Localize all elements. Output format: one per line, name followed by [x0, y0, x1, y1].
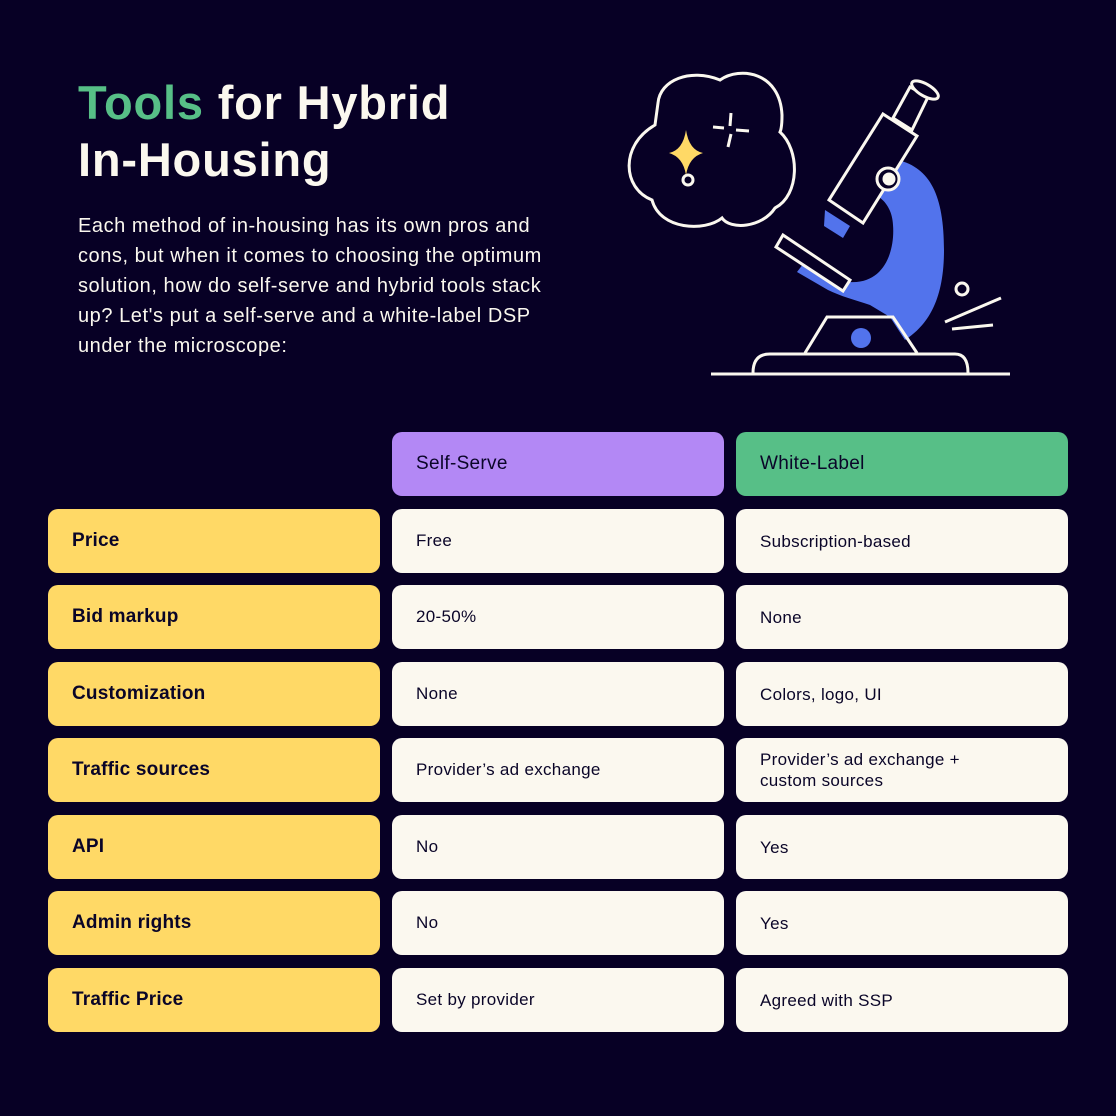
intro paragraph: up? Let's put a self-serve and a white-label DSP — [78, 305, 531, 327]
row: Admin rights: Admin rights — [72, 912, 192, 933]
title: In-Housing — [78, 133, 331, 186]
row: Traffic sources: Provider’s ad exchange + — [760, 750, 960, 769]
row: Admin rights: Yes — [760, 914, 789, 932]
row: Traffic Price: Set by provider — [416, 990, 535, 1009]
row: Price: Price — [72, 530, 119, 551]
row: Customization: None — [416, 684, 458, 703]
row: Price: Free — [416, 531, 452, 550]
row: Bid markup: 20-50% — [416, 607, 476, 626]
row: Traffic sources: Provider’s ad exchange — [416, 760, 601, 779]
row: API — [48, 815, 1068, 879]
row: Price: Subscription-based — [760, 532, 911, 550]
row: API: Yes — [760, 838, 789, 856]
row: Bid markup — [48, 585, 1068, 649]
table header: White-Label: White-Label — [760, 453, 865, 474]
row: API: API — [72, 836, 104, 857]
intro paragraph: under the microscope: — [78, 335, 287, 357]
row: Traffic Price — [48, 968, 1068, 1032]
row: Customization: Customization — [72, 683, 206, 704]
icon: thought cloud — [629, 73, 794, 226]
row: Traffic sources — [48, 738, 1068, 802]
row: Traffic Price: Agreed with SSP — [760, 990, 893, 1010]
icon: microscope — [711, 77, 1010, 374]
row: Bid markup: None — [760, 608, 802, 626]
row: Price — [48, 509, 1068, 573]
title — [78, 76, 450, 186]
table header: White-Label — [736, 432, 1068, 496]
title: Tools for Hybrid — [78, 76, 450, 129]
intro paragraph: cons, but when it comes to choosing the optimum — [78, 245, 542, 267]
intro paragraph: solution, how do self-serve and hybrid tools stack — [78, 275, 541, 297]
intro paragraph — [78, 215, 542, 357]
intro paragraph: Each method of in-housing has its own pros and — [78, 215, 530, 237]
row: Traffic sources: Traffic sources — [72, 759, 210, 780]
row: Traffic Price: Traffic Price — [72, 989, 183, 1010]
table header: Self-Serve — [392, 432, 724, 496]
row: API: No — [416, 837, 438, 856]
row: Customization: Colors, logo, UI — [760, 684, 882, 704]
row: Admin rights — [48, 891, 1068, 955]
row: Customization — [48, 662, 1068, 726]
table header: Self-Serve: Self-Serve — [416, 453, 508, 474]
row: Admin rights: No — [416, 913, 438, 932]
illustration: microscope — [628, 72, 1010, 376]
row: Bid markup: Bid markup — [72, 606, 179, 627]
row: Traffic sources: custom sources — [760, 771, 883, 790]
